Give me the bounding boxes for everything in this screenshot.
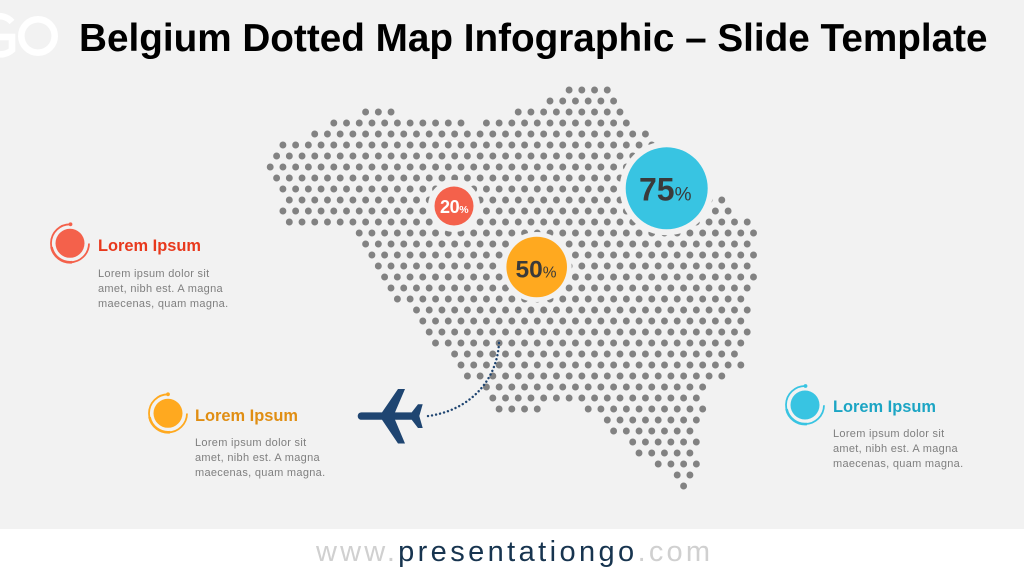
icon: red marker — [51, 222, 89, 262]
text block: red: Lorem ipsum dolor sit — [98, 268, 209, 280]
website url: www.presentationgo.com — [316, 536, 713, 568]
map dots — [270, 90, 754, 486]
text block: yellow: amet, nibh est. A magna — [195, 452, 320, 464]
text block: red: Lorem Ipsum — [98, 237, 201, 255]
text block: red — [98, 237, 228, 310]
logo fragment — [0, 13, 58, 58]
footer — [0, 529, 1024, 576]
icon: blue marker — [786, 384, 824, 424]
title: Belgium Dotted Map Infographic – Slide Template — [79, 17, 988, 60]
text block: yellow: maecenas, quam magna. — [195, 467, 325, 479]
flight path — [424, 343, 499, 416]
callout: 50% — [502, 232, 572, 302]
icon: airplane — [358, 389, 423, 444]
text block: blue: Lorem Ipsum — [833, 398, 936, 416]
text block: blue: maecenas, quam magna. — [833, 458, 963, 470]
callout: 75%: 75% — [639, 172, 692, 208]
text block: red: maecenas, quam magna. — [98, 298, 228, 310]
text block: blue: amet, nibh est. A magna — [833, 443, 958, 455]
text block: blue: Lorem ipsum dolor sit — [833, 428, 944, 440]
callout: 20%: 20% — [440, 197, 469, 217]
text block: yellow — [195, 407, 325, 479]
icon: yellow marker — [149, 392, 187, 432]
callout: 75% — [620, 141, 714, 235]
text block: yellow: Lorem ipsum dolor sit — [195, 436, 306, 448]
callout: 20% — [428, 180, 480, 232]
callout: 50%: 50% — [516, 256, 557, 284]
text block: blue — [833, 398, 963, 470]
text block: yellow: Lorem Ipsum — [195, 407, 298, 425]
text block: red: amet, nibh est. A magna — [98, 283, 223, 295]
